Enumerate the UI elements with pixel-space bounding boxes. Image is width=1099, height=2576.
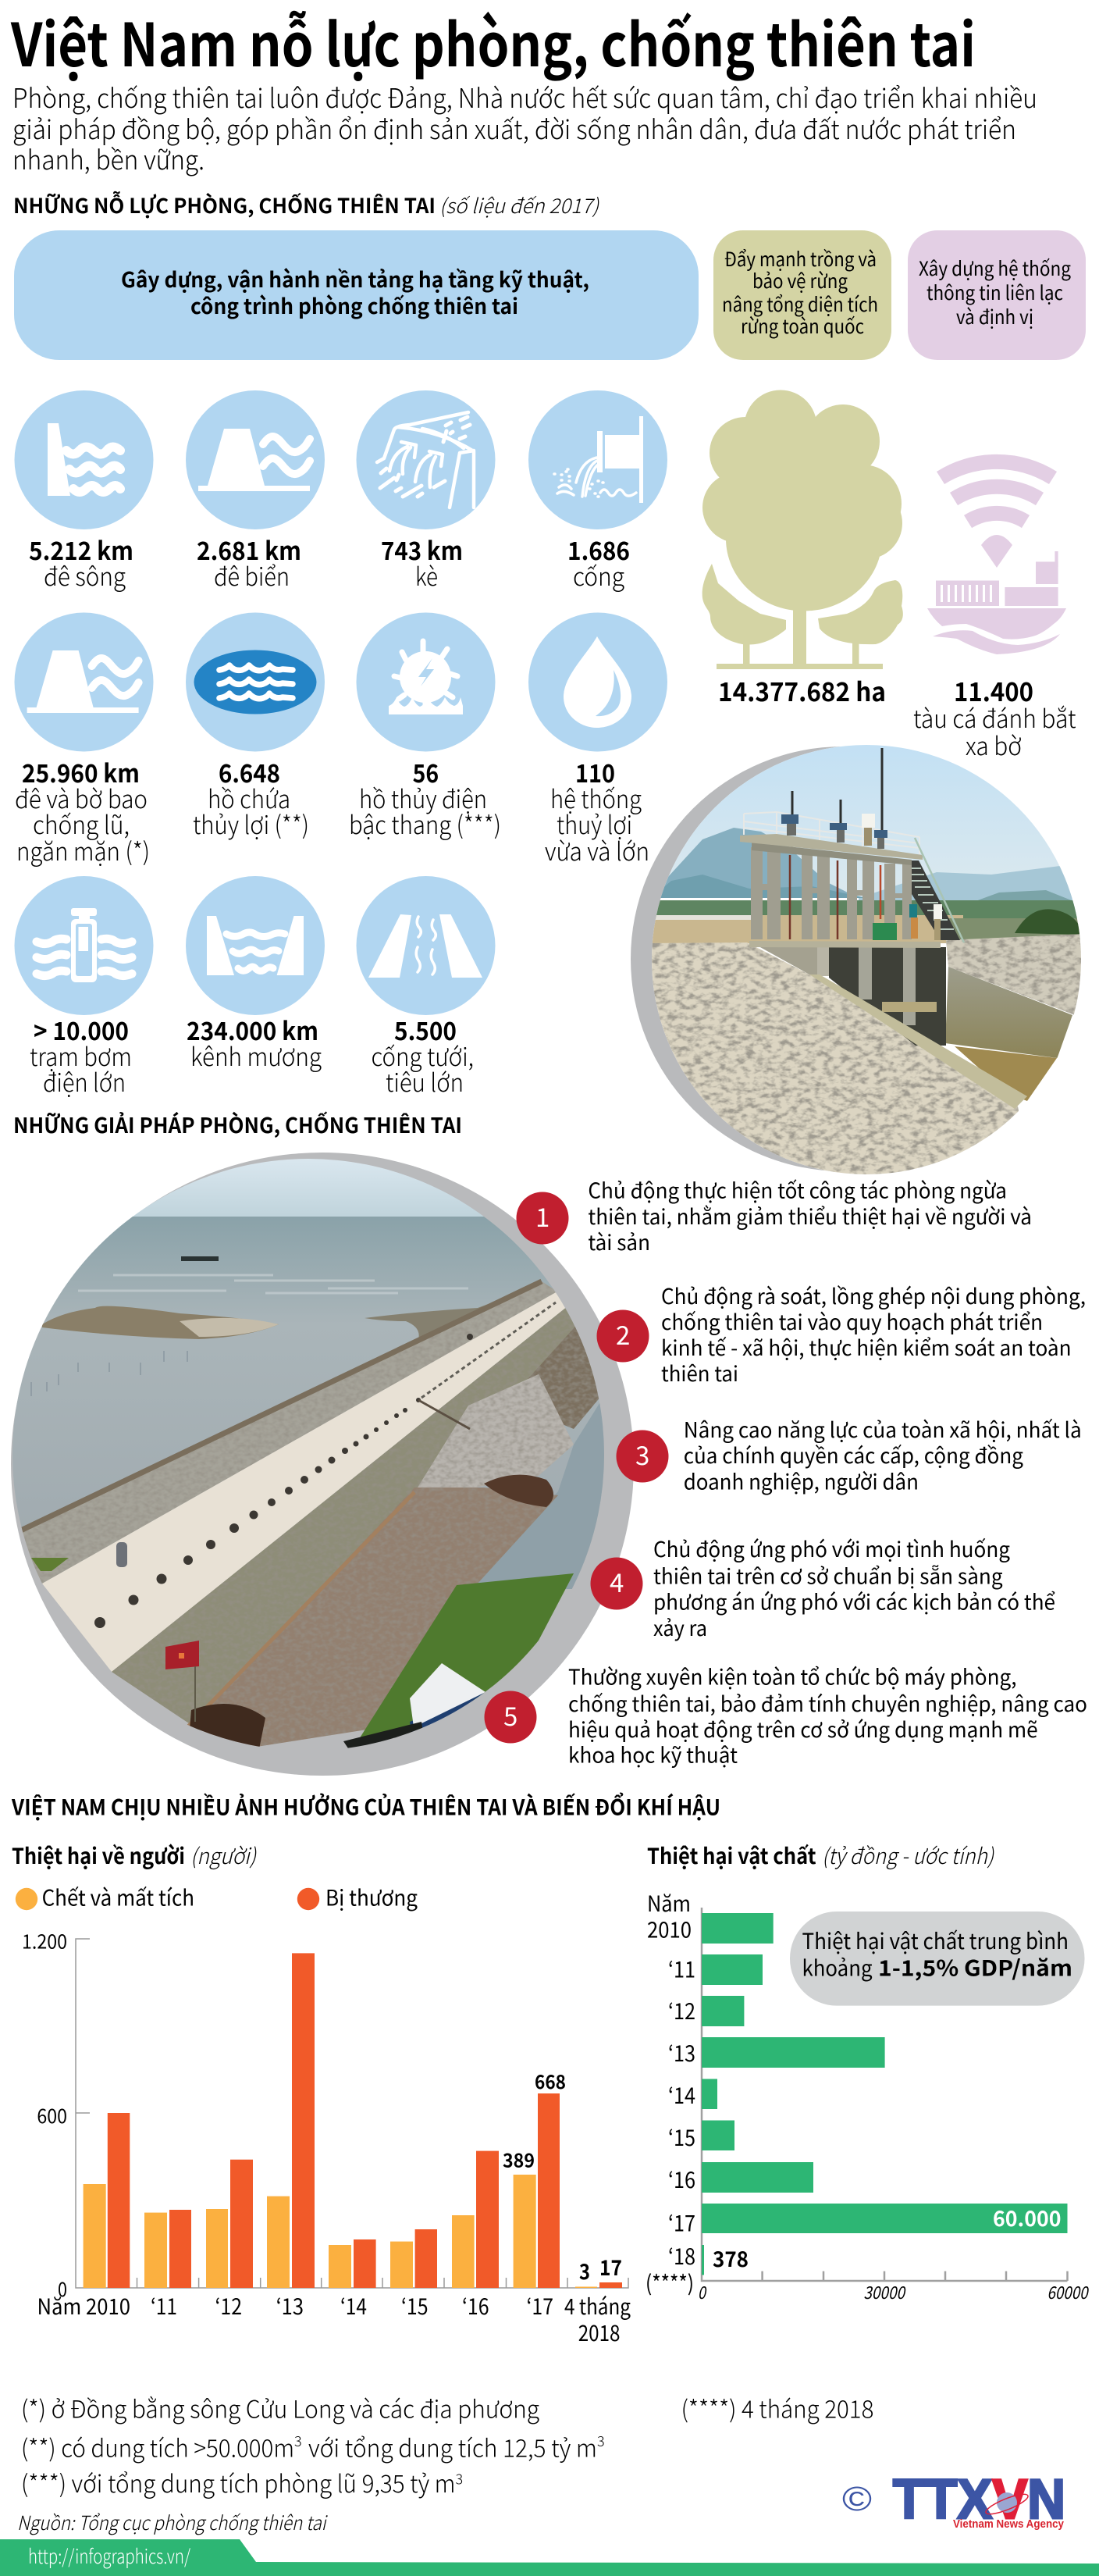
stat: irrigation systems <box>545 754 649 868</box>
section heading: efforts: (số liệu đến 2017) <box>439 191 599 219</box>
panel: communication <box>908 230 1086 360</box>
panel: communication: và định vị <box>956 302 1033 330</box>
year labels: 2010 <box>647 1914 692 1945</box>
bar value labels: 378 <box>713 2243 749 2273</box>
year labels: Năm <box>647 1887 691 1919</box>
stat: embankment: kè <box>415 558 438 593</box>
icon: wifi and ship <box>927 461 1066 654</box>
stat: fishing boats: 11.400 <box>954 672 1033 709</box>
stat: sluice <box>567 532 630 593</box>
stat: flood dyke: 25.960 km <box>22 754 140 790</box>
x axis labels: ‘15 <box>401 2290 428 2321</box>
chart heading: material losses: (tỷ đồng - ước tính) <box>822 1840 994 1871</box>
bar value labels: 668 <box>535 2067 566 2094</box>
x axis labels: ‘16 <box>462 2290 489 2321</box>
panel: forest: rừng toàn quốc <box>741 312 864 340</box>
stat: river dyke: 5.212 km <box>29 532 133 568</box>
footnotes: với tổng dung tích 12,5 tỷ m <box>308 2429 597 2464</box>
icon: flood dyke <box>14 612 153 751</box>
step 5: 5 <box>503 1696 517 1733</box>
step 3: của chính quyền các cấp, cộng đồng <box>684 1439 1023 1470</box>
panel: infrastructure: Gây dựng, vận hành nền tảng hạ tầng kỹ thuật, <box>121 263 589 294</box>
step 4: Chủ động ứng phó với mọi tình huống <box>653 1533 1010 1563</box>
legend: Bị thương <box>325 1882 418 1913</box>
stat: sea dyke <box>197 532 301 593</box>
icon: water drop <box>528 612 667 751</box>
stat: flood dyke: chống lũ, <box>33 806 130 842</box>
y axis labels: 0 <box>58 2275 67 2303</box>
stat: irrigation systems: vừa và lớn <box>545 832 649 868</box>
panel: communication: Xây dựng hệ thống <box>919 254 1071 282</box>
icon: irrigation culvert <box>356 876 495 1015</box>
logo: TTXVN: TTXVN <box>893 2469 1065 2531</box>
source: Nguồn: Tổng cục phòng chống thiên tai <box>17 2508 328 2536</box>
step 2: 2 <box>616 1315 630 1352</box>
x axis labels: ‘13 <box>276 2290 304 2321</box>
year labels: ‘18 <box>668 2240 695 2271</box>
icon: reservoir <box>186 612 325 751</box>
chart heading: material losses: Thiệt hại vật chất <box>647 1840 816 1871</box>
photo: sea dyke <box>8 1153 634 1776</box>
footnotes <box>21 2390 873 2499</box>
x axis labels: 4 tháng <box>564 2290 631 2321</box>
stat: fishing boats <box>913 672 1076 763</box>
section heading: impact: VIỆT NAM CHỊU NHIỀU ẢNH HƯỞNG CỦA THIÊN TAI VÀ BIẾN ĐỔI KHÍ HẬU <box>11 1791 720 1822</box>
step 1: 1 <box>535 1197 550 1235</box>
footnotes: 3 <box>456 2469 463 2489</box>
stat: hydropower: bậc thang (***) <box>349 806 501 842</box>
year labels: ‘15 <box>668 2122 695 2153</box>
value axis labels: 30000 <box>863 2279 906 2304</box>
step 3 <box>617 1413 1082 1496</box>
x axis labels: ‘14 <box>340 2290 367 2321</box>
stat: canal: 234.000 km <box>187 1012 318 1048</box>
chart heading: human losses: Thiệt hại về người <box>12 1840 185 1871</box>
stat: pump station: trạm bơm <box>30 1038 132 1074</box>
stat: embankment: 743 km <box>381 532 463 568</box>
stat: pump station: điện lớn <box>43 1064 126 1099</box>
icon: tree <box>702 390 903 669</box>
x axis labels: 2018 <box>578 2317 620 2348</box>
footnotes: (***) với tổng dung tích phòng lũ 9,35 tỷ m <box>21 2464 456 2499</box>
footer band <box>0 2539 1099 2576</box>
stat: reservoir <box>193 754 309 842</box>
stat: reservoir: thủy lợi (**) <box>193 806 309 842</box>
bar value labels: 60.000 <box>993 2202 1062 2232</box>
legend <box>16 1882 418 1913</box>
y axis labels: 1.200 <box>22 1927 67 1955</box>
footnotes: (****) 4 tháng 2018 <box>681 2390 873 2425</box>
bar chart: material losses <box>646 1887 1090 2304</box>
chart heading: material losses <box>647 1840 994 1871</box>
legend: Chết và mất tích <box>42 1882 194 1913</box>
step 2: Chủ động rà soát, lồng ghép nội dung phòng, <box>661 1280 1086 1310</box>
panel: forest: bảo vệ rừng <box>752 266 848 294</box>
stat: canal <box>187 1012 322 1074</box>
year labels: ‘13 <box>668 2037 695 2068</box>
icon: river dyke <box>14 390 153 529</box>
step 5: Thường xuyên kiện toàn tổ chức bộ máy phòng, <box>568 1661 1016 1691</box>
step 1 <box>517 1174 1032 1256</box>
icon: sluice <box>528 390 667 529</box>
stat: river dyke: đê sông <box>44 558 126 593</box>
bar value labels: 17 <box>599 2251 622 2282</box>
stat: flood dyke <box>15 754 150 868</box>
step 5: chống thiên tai, bảo đảm tính chuyên nghiệp, nâng cao <box>568 1687 1087 1718</box>
step 1: Chủ động thực hiện tốt công tác phòng ngừa <box>588 1174 1007 1205</box>
panel: communication: thông tin liên lạc <box>927 278 1063 306</box>
stat: irrigation systems: 110 <box>575 754 615 790</box>
section heading: solutions: NHỮNG GIẢI PHÁP PHÒNG, CHỐNG THIÊN TAI <box>13 1109 462 1139</box>
footnotes: (**) có dung tích >50.000m <box>21 2429 294 2464</box>
x axis labels: ‘17 <box>526 2290 553 2321</box>
chart heading: human losses: (người) <box>190 1840 257 1871</box>
step 5 <box>484 1661 1087 1769</box>
step 5: khoa học kỹ thuật <box>568 1738 738 1769</box>
step 3: 3 <box>635 1435 649 1473</box>
x axis labels <box>37 2290 631 2348</box>
stat: flood dyke: ngăn mặn (*) <box>16 832 150 868</box>
panel: forest: nâng tổng diện tích <box>722 290 878 318</box>
intro text: giải pháp đồng bộ, góp phần ổn định sản xuất, đời sống nhân dân, đưa đất nước phát triển <box>12 109 1016 147</box>
y axis labels: 600 <box>37 2101 67 2129</box>
panel: infrastructure: công trình phòng chống thiên tai <box>190 290 518 320</box>
stat: irrigation culvert <box>372 1012 474 1099</box>
year labels: ‘11 <box>668 1954 695 1985</box>
step 4: thiên tai trên cơ sở chuẩn bị sẵn sàng <box>653 1560 1003 1590</box>
step 5: hiệu quả hoạt động trên cơ sở ứng dụng mạnh mẽ <box>568 1713 1038 1744</box>
icon: hydropower <box>356 612 495 751</box>
step 4: xảy ra <box>653 1612 707 1642</box>
stat: irrigation systems: thuỷ lợi <box>557 806 632 842</box>
value axis labels <box>698 2279 1090 2304</box>
step 3: Nâng cao năng lực của toàn xã hội, nhất là <box>684 1413 1082 1444</box>
logo: TTXVN: © <box>842 2480 872 2518</box>
stat: forest area: 14.377.682 ha <box>718 672 886 709</box>
icon: sea dyke <box>186 390 325 529</box>
stat: irrigation culvert: cống tưới, <box>372 1038 474 1074</box>
footnotes: (*) ở Đồng bằng sông Cửu Long và các địa phương <box>21 2390 539 2425</box>
year labels: (****) <box>646 2267 694 2298</box>
bar value labels <box>713 2202 1062 2273</box>
stat: pump station: > 10.000 <box>34 1012 129 1048</box>
stat: sea dyke: 2.681 km <box>197 532 301 568</box>
step 1: thiên tai, nhằm giảm thiểu thiệt hại về người và <box>588 1200 1032 1231</box>
x axis labels: ‘11 <box>151 2290 177 2321</box>
stat: hydropower: 56 <box>413 754 439 790</box>
logo: TTXVN: Vietnam News Agency <box>953 2517 1065 2531</box>
section heading: efforts: NHỮNG NỖ LỰC PHÒNG, CHỐNG THIÊN TAI <box>13 191 436 219</box>
year labels: ‘14 <box>668 2079 695 2111</box>
stat: irrigation systems: hệ thống <box>550 780 642 816</box>
intro text <box>12 77 1037 177</box>
stat: sluice: 1.686 <box>567 532 630 568</box>
panel: forest: Đẩy mạnh trồng và <box>724 244 877 273</box>
icon: pump station <box>14 876 153 1015</box>
intro text: Phòng, chống thiên tai luôn được Đảng, Nhà nước hết sức quan tâm, chỉ đạo triển khai nhiều <box>12 77 1037 116</box>
stat: reservoir: hồ chứa <box>208 780 290 816</box>
stat: hydropower: hồ thủy điện <box>359 780 487 816</box>
step 3: doanh nghiệp, người dân <box>684 1465 919 1496</box>
stat: pump station <box>30 1012 132 1099</box>
stat: reservoir: 6.648 <box>219 754 280 790</box>
stat: sea dyke: đê biển <box>214 558 290 593</box>
value axis labels: 60000 <box>1047 2279 1090 2304</box>
icon: embankment <box>356 390 495 529</box>
value axis labels: 0 <box>698 2279 707 2304</box>
stat: river dyke <box>29 532 133 593</box>
stat: irrigation culvert: 5.500 <box>394 1012 457 1048</box>
step 2: chống thiên tai vào quy hoạch phát triển <box>661 1306 1043 1336</box>
year labels: ‘17 <box>668 2207 695 2238</box>
year labels: ‘12 <box>668 1995 695 2026</box>
y axis labels <box>22 1927 67 2303</box>
stat: irrigation culvert: tiêu lớn <box>386 1064 464 1099</box>
footer band: http://infographics.vn/ <box>28 2542 190 2570</box>
x axis labels: Năm 2010 <box>37 2290 130 2321</box>
stat: flood dyke: đê và bờ bao <box>15 780 148 816</box>
year labels: ‘16 <box>668 2164 695 2195</box>
callout: average damage <box>790 1912 1085 2006</box>
panel: infrastructure <box>14 230 699 360</box>
intro text: nhanh, bền vững. <box>12 139 205 177</box>
bar value labels: 389 <box>503 2146 535 2172</box>
year labels <box>646 1887 695 2298</box>
bar value labels: 3 <box>579 2255 590 2286</box>
step 1: tài sản <box>588 1226 650 1256</box>
callout: average damage: 1-1,5% GDP/năm <box>878 1952 1072 1983</box>
panel: forest <box>713 230 891 360</box>
bar chart: human losses <box>22 1927 631 2348</box>
step 4 <box>590 1533 1055 1642</box>
photo: sluice gate <box>631 742 1085 1179</box>
stat: fishing boats: tàu cá đánh bắt <box>913 700 1076 736</box>
step 4: phương án ứng phó với các kịch bản có thể <box>653 1586 1055 1616</box>
bar value labels <box>503 2067 622 2286</box>
stat: embankment <box>381 532 463 593</box>
footnotes: 3 <box>294 2431 302 2451</box>
callout: average damage: khoảng <box>802 1952 873 1983</box>
x axis labels: ‘12 <box>215 2290 242 2321</box>
step 2: kinh tế - xã hội, thực hiện kiểm soát an toàn <box>661 1331 1072 1362</box>
step 4: 4 <box>610 1562 624 1600</box>
stat: canal: kênh mương <box>190 1038 322 1074</box>
stat: sluice: cống <box>573 558 624 593</box>
callout: average damage: Thiệt hại vật chất trung bình <box>802 1925 1069 1956</box>
step 2: thiên tai <box>661 1357 738 1388</box>
stat: hydropower <box>349 754 501 842</box>
footnotes: 3 <box>597 2431 605 2451</box>
icon: canal <box>186 876 325 1015</box>
stat: fishing boats: xa bờ <box>966 727 1022 763</box>
step 2 <box>596 1280 1086 1388</box>
